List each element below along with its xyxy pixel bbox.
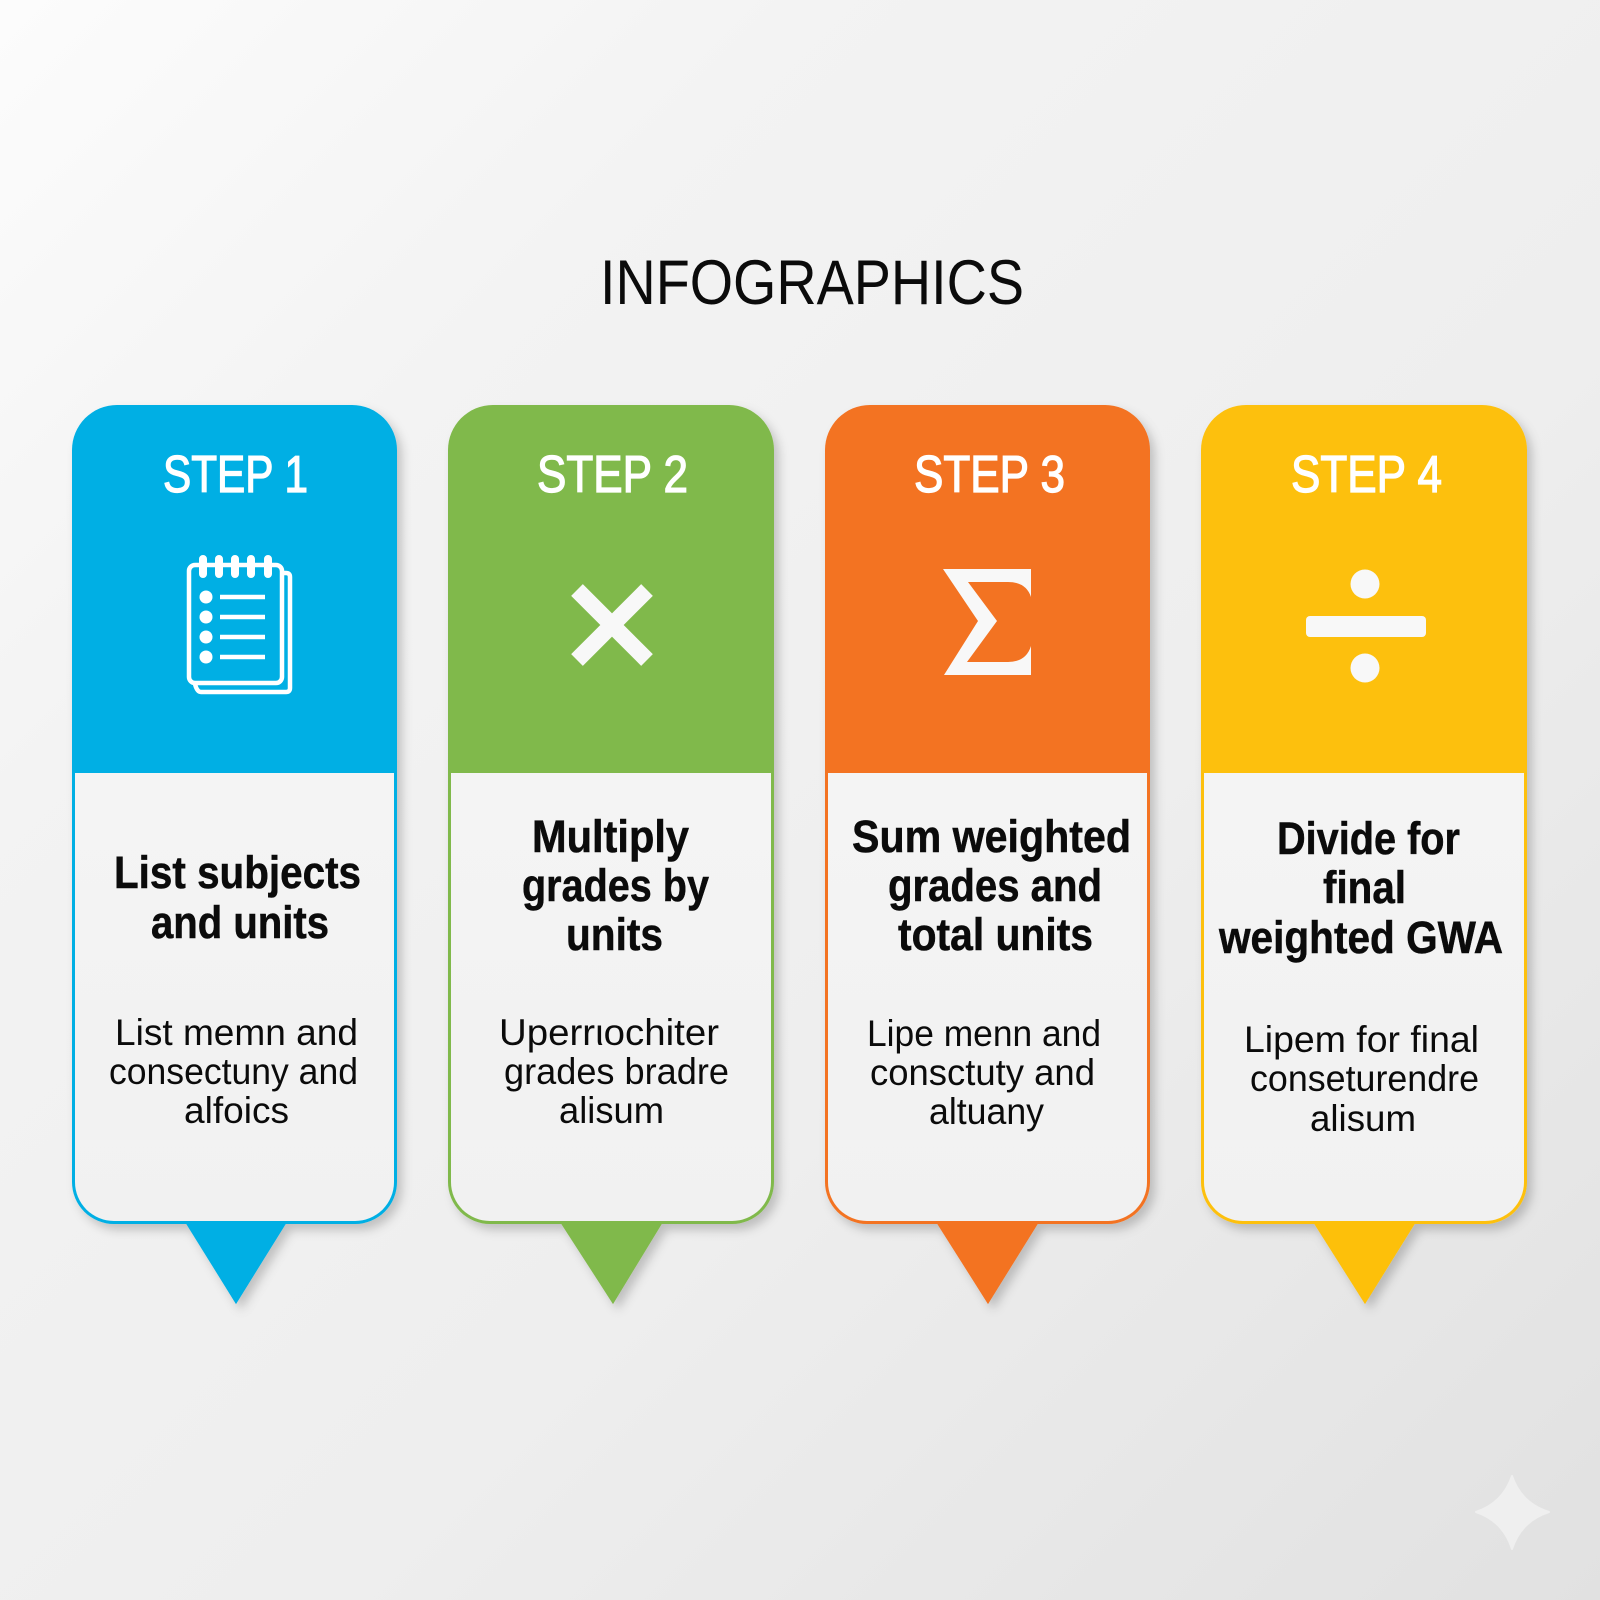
description: step 4: alisum: [1310, 1098, 1416, 1139]
heading: step 3: [852, 811, 1131, 960]
pointer: step 1: [185, 1221, 287, 1304]
description: step 2: grades bradre: [504, 1051, 729, 1092]
description: step 3: altuany: [929, 1091, 1044, 1132]
heading: step 2: [522, 811, 709, 960]
icon: notebook: [189, 559, 290, 692]
description: step 3: consctuty and: [870, 1052, 1095, 1093]
pointer: step 2: [560, 1221, 663, 1304]
card body: step 4: [1201, 405, 1527, 1304]
icon: sigma: [943, 569, 1031, 675]
description: step 2: [499, 1012, 729, 1131]
heading: step 3: total units: [898, 909, 1093, 960]
heading: step 4: final: [1323, 862, 1406, 913]
card body: step 2: [448, 405, 774, 1304]
card body: step 1: [72, 405, 397, 1304]
description: step 4: conseturendre: [1250, 1058, 1479, 1099]
heading: step 2: units: [566, 909, 663, 960]
description: step 2: alisum: [559, 1090, 664, 1131]
heading: step 1: and units: [151, 897, 329, 948]
heading: step 4: [1218, 813, 1503, 963]
description: step 3: [867, 1013, 1101, 1132]
icon: sparkle watermark: [1476, 1476, 1549, 1549]
heading: step 2: Multiply: [532, 811, 689, 862]
step label 4: STEP 4: [1291, 446, 1442, 504]
title: INFOGRAPHICS: [600, 248, 1024, 318]
panel: step 4: [1201, 405, 1527, 1304]
heading: step 1: [114, 847, 361, 948]
description: step 4: Lipem for final: [1244, 1019, 1479, 1060]
heading: step 1: List subjects: [114, 847, 361, 898]
panel: step 3: [825, 405, 1150, 1304]
content area: step 2: [451, 773, 771, 1221]
description: step 1: List memn and: [115, 1012, 358, 1053]
panel: step 1: [72, 405, 397, 1304]
icon: multiply: [577, 590, 647, 660]
card body: step 3: [825, 405, 1150, 1304]
step label 3: STEP 3: [914, 446, 1065, 504]
description: step 3: Lipe menn and: [867, 1013, 1101, 1054]
icon: divide: [1306, 570, 1426, 682]
description: step 1: alfoics: [184, 1090, 289, 1131]
content area: step 3: [828, 773, 1147, 1221]
description: step 2: Uperrιochiter: [499, 1012, 719, 1053]
step label 1: STEP 1: [163, 446, 308, 504]
heading: step 3: grades and: [888, 860, 1102, 911]
description: step 1: [109, 1012, 358, 1131]
pointer: step 4: [1313, 1221, 1416, 1304]
step label 2: STEP 2: [537, 446, 688, 504]
pointer: step 3: [936, 1221, 1039, 1304]
heading: step 2: grades by: [522, 860, 709, 911]
panel: step 2: [448, 405, 774, 1304]
heading: step 3: Sum weighted: [852, 811, 1131, 862]
heading: step 4: Divide for: [1277, 813, 1460, 864]
content area: step 4: [1204, 773, 1524, 1221]
description: step 4: [1244, 1019, 1479, 1139]
description: step 1: consectuny and: [109, 1051, 358, 1092]
content area: step 1: [75, 773, 394, 1221]
heading: step 4: weighted GWA: [1218, 912, 1503, 963]
